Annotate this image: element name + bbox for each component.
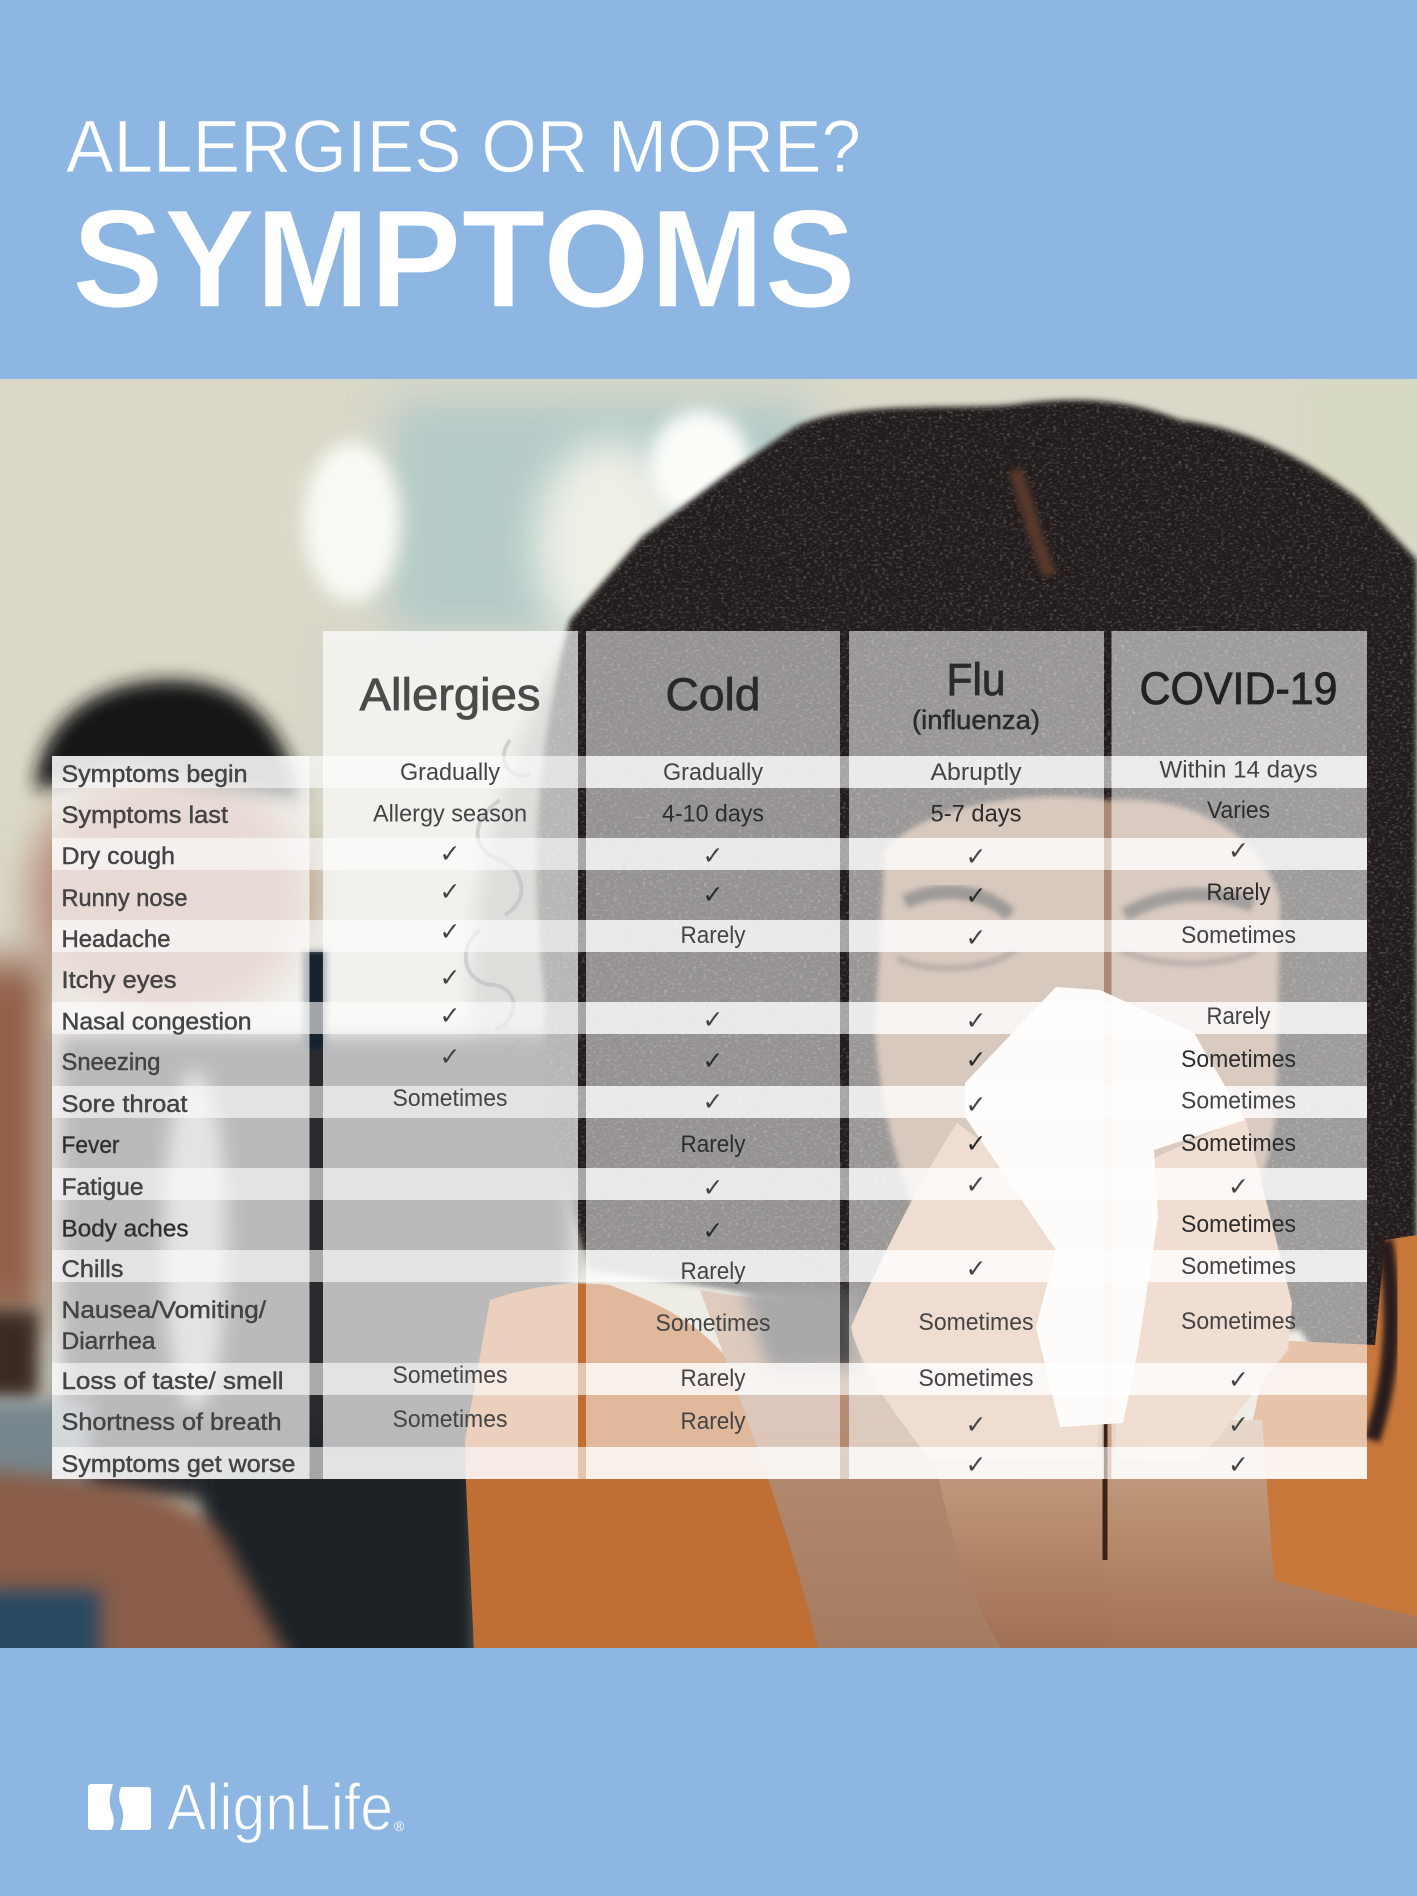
tissue	[965, 987, 1245, 1427]
row: Nausea/Vomiting/Diarrhea: Sometimes	[918, 1309, 1034, 1336]
woman hair	[536, 400, 1417, 1440]
row: Symptoms begin: Abruptly	[930, 759, 1022, 786]
row: Loss of taste/smell: Loss of taste/ smell	[62, 1368, 284, 1395]
row: Nasal congestion: ✓	[440, 1001, 460, 1030]
row: Symptoms get worse: ✓	[966, 1450, 986, 1479]
hands	[851, 1123, 1100, 1460]
row: Runny nose: ✓	[440, 877, 460, 906]
row: Nausea/Vomiting/Diarrhea: Nausea/Vomiting/	[62, 1297, 266, 1324]
arm right	[1106, 1420, 1417, 1660]
heading: COVID-19: COVID-19	[1140, 663, 1338, 714]
row: Nausea/Vomiting/Diarrhea: Diarrhea	[62, 1328, 156, 1355]
row: Sore throat: ✓	[966, 1090, 986, 1119]
row: Dry cough: ✓	[440, 839, 460, 868]
neck shadow under hair	[740, 1285, 860, 1372]
row: Nausea/Vomiting/Diarrhea: Sometimes	[1181, 1308, 1296, 1335]
row: Nasal congestion	[62, 1001, 1270, 1036]
heading: Flu (influenza): (influenza)	[912, 705, 1040, 735]
sweater	[465, 1284, 830, 1648]
row: Shortness of breath: ✓	[966, 1410, 986, 1439]
row: Fever: Fever	[62, 1132, 120, 1159]
row: Nasal congestion: ✓	[703, 1005, 723, 1034]
row: Fever: ✓	[966, 1129, 986, 1158]
row: Fatigue: ✓	[1228, 1172, 1249, 1201]
row: Fever: Rarely	[680, 1131, 746, 1158]
row: Runny nose: ✓	[703, 880, 723, 909]
row: Itchy eyes: Itchy eyes	[62, 967, 176, 994]
logo wordmark: AlignLife	[167, 1770, 393, 1844]
row: Shortness of breath: ✓	[1228, 1410, 1249, 1439]
row: Sneezing: Sneezing	[62, 1049, 160, 1076]
row: Symptoms get worse: ✓	[1228, 1450, 1249, 1479]
title: symptoms: SYMPTOMS	[72, 180, 856, 337]
row: Symptoms begin: Gradually	[663, 759, 763, 786]
row: Shortness of breath	[62, 1406, 1249, 1439]
row: Headache: ✓	[966, 923, 986, 952]
chest and neck	[700, 1290, 1002, 1648]
row: Headache: Sometimes	[1181, 922, 1296, 949]
face	[872, 794, 1283, 1205]
row: Body aches	[62, 1211, 1296, 1245]
row: Loss of taste/smell: Sometimes	[392, 1362, 508, 1389]
row: Symptoms last: 4-10 days	[662, 800, 764, 828]
row: Runny nose	[62, 877, 1270, 912]
row: Sore throat	[62, 1085, 1296, 1119]
row: Dry cough: ✓	[1228, 836, 1249, 865]
row: Dry cough: Dry cough	[62, 843, 175, 870]
row: Body aches: Sometimes	[1181, 1211, 1296, 1238]
heading: Flu (influenza)	[912, 654, 1040, 735]
row: Sore throat: ✓	[703, 1087, 723, 1116]
row: Chills: Sometimes	[1181, 1253, 1296, 1280]
row: Symptoms begin: Symptoms begin	[62, 761, 248, 788]
row: Symptoms last: Symptoms last	[62, 802, 228, 829]
row: Fatigue	[62, 1170, 1249, 1202]
heading: Cold: Cold	[666, 669, 760, 720]
row: Runny nose: ✓	[966, 881, 986, 910]
light row stripes in right columns	[586, 756, 1367, 1479]
row: Dry cough: ✓	[703, 841, 723, 870]
title: allergies or more: ALLERGIES OR MORE?	[66, 105, 861, 188]
row: Shortness of breath: Shortness of breath	[62, 1409, 282, 1436]
row: Symptoms begin: Gradually	[400, 759, 500, 786]
row: Shortness of breath: Rarely	[680, 1408, 746, 1435]
row: Symptoms last: Allergy season	[373, 800, 527, 828]
row: Fatigue: ✓	[703, 1173, 723, 1202]
light row stripes	[52, 756, 1367, 1479]
row: Fever	[62, 1129, 1296, 1159]
row: Symptoms get worse	[62, 1450, 1249, 1479]
hair fringe curls over the allergies column	[464, 661, 586, 1274]
row: Loss of taste/smell	[62, 1362, 1249, 1395]
row: Sore throat: Sometimes	[1181, 1088, 1296, 1114]
bottom band	[0, 1648, 1417, 1896]
registered mark: ®	[394, 1818, 405, 1834]
row: Loss of taste/smell: ✓	[1228, 1365, 1249, 1394]
column panels	[52, 631, 1367, 1479]
row: Sneezing: ✓	[966, 1045, 986, 1074]
row: Dry cough	[62, 836, 1249, 871]
row: Symptoms begin: Within 14 days	[1160, 756, 1318, 784]
row: Sneezing: ✓	[703, 1046, 723, 1075]
row: Fatigue: Fatigue	[62, 1174, 144, 1201]
row: Sneezing	[62, 1042, 1296, 1076]
row: Runny nose: Runny nose	[62, 885, 188, 912]
row: Sneezing: ✓	[440, 1042, 460, 1071]
table	[52, 631, 1367, 1479]
row: Dry cough: ✓	[966, 842, 986, 871]
row: Headache: Headache	[62, 926, 170, 953]
row: Headache: ✓	[440, 917, 460, 946]
row: Body aches: Body aches	[62, 1216, 188, 1242]
heading: Flu (influenza): Flu	[946, 654, 1006, 705]
row: Chills: Rarely	[680, 1258, 746, 1285]
row: Itchy eyes: ✓	[440, 963, 460, 992]
row: Loss of taste/smell: Sometimes	[918, 1365, 1034, 1392]
row: Nasal congestion: ✓	[966, 1006, 986, 1035]
row: Symptoms begin	[62, 756, 1318, 788]
row: Chills	[62, 1253, 1296, 1285]
row: Sneezing: Sometimes	[1181, 1046, 1296, 1073]
heading: Allergies: Allergies	[360, 669, 540, 720]
row: Symptoms last	[62, 797, 1270, 829]
row: Symptoms last: Varies	[1207, 797, 1270, 824]
logo: AlignLife	[88, 1770, 405, 1844]
row: Itchy eyes	[62, 963, 460, 994]
row: Symptoms last: 5-7 days	[930, 800, 1022, 828]
row: Body aches: ✓	[703, 1216, 723, 1245]
row: Nausea/Vomiting/Diarrhea: Sometimes	[656, 1310, 770, 1337]
row: Headache: Rarely	[680, 922, 746, 949]
row: Runny nose: Rarely	[1206, 879, 1270, 906]
row: Fever: Sometimes	[1181, 1130, 1296, 1157]
row: Chills: ✓	[966, 1254, 986, 1283]
row: Nausea/Vomiting/Diarrhea	[62, 1297, 1296, 1355]
icon: logo mark	[88, 1784, 151, 1830]
row: Sore throat: Sometimes	[392, 1085, 508, 1112]
header band	[0, 0, 1417, 379]
background man	[0, 680, 570, 1680]
row: Loss of taste/smell: Rarely	[680, 1365, 746, 1392]
row: Shortness of breath: Sometimes	[392, 1406, 508, 1433]
photo: woman blowing nose with blurred background	[0, 379, 1417, 1680]
row: Nasal congestion: Rarely	[1206, 1003, 1270, 1030]
row: Nasal congestion: Nasal congestion	[62, 1008, 252, 1036]
row: Chills: Chills	[62, 1256, 124, 1283]
row: Headache	[62, 917, 1296, 953]
row: Sore throat: Sore throat	[62, 1091, 188, 1118]
arm left	[930, 1420, 1110, 1650]
row: Symptoms get worse: Symptoms get worse	[62, 1451, 296, 1478]
row: Fatigue: ✓	[966, 1170, 986, 1199]
